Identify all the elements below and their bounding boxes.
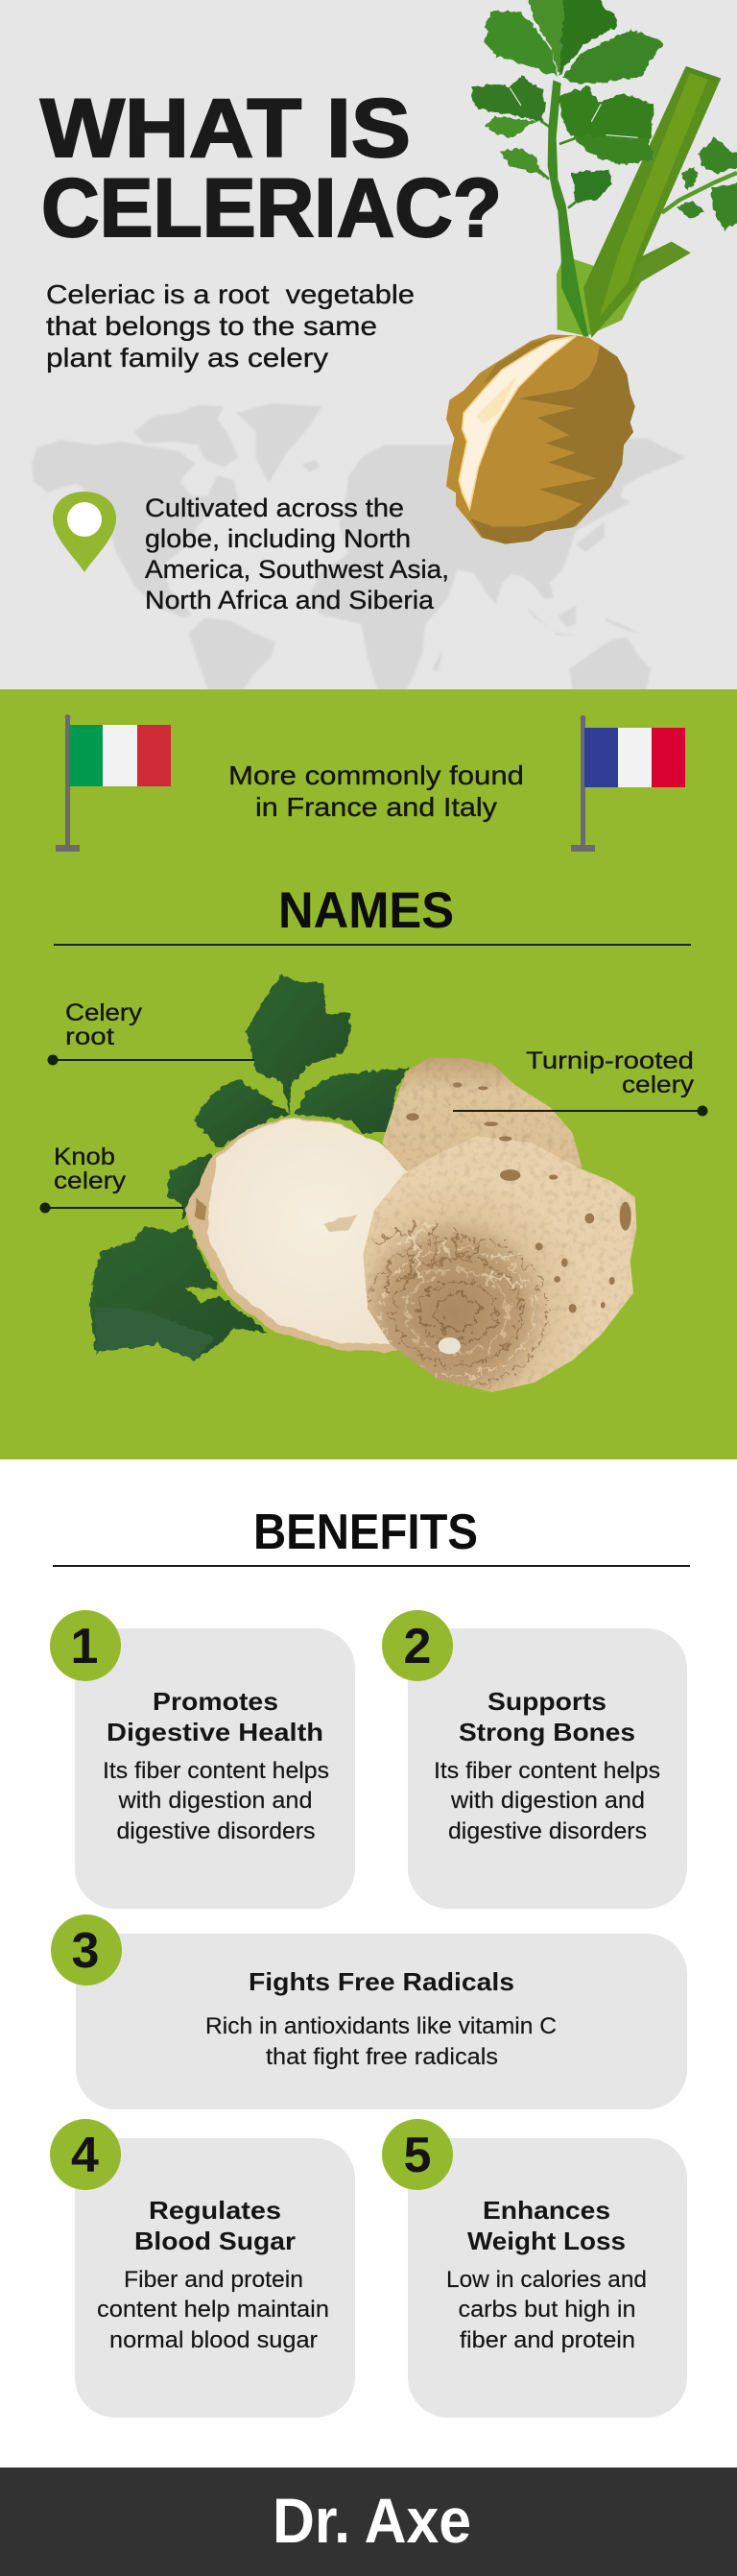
cultivation text: Cultivated across the xyxy=(145,494,404,522)
cultivation text: America, Southwest Asia, xyxy=(145,555,449,584)
title xyxy=(40,83,502,254)
card 3: free radicals: 3 xyxy=(72,1923,99,1979)
stalk xyxy=(583,66,721,338)
card 5: weight loss: Enhances xyxy=(483,2196,610,2225)
intro text xyxy=(46,279,415,373)
card 5: weight loss: fiber and protein xyxy=(460,2327,635,2353)
card 2: strong bones: with digestion and xyxy=(450,1788,645,1814)
card 2: strong bones xyxy=(382,1610,687,1909)
label: turnip-rooted celery: Turnip-rooted xyxy=(526,1047,694,1074)
label: celery root xyxy=(48,999,254,1066)
card 4: blood sugar: 4 xyxy=(71,2128,99,2183)
card 1: digestive health: Its fiber content helps xyxy=(103,1758,329,1784)
card 4: blood sugar xyxy=(50,2119,355,2418)
card 1: digestive health: Promotes xyxy=(153,1687,278,1716)
cultivation text: globe, including North xyxy=(145,524,411,553)
card 5: weight loss: Weight Loss xyxy=(467,2227,626,2255)
card 1: digestive health: Digestive Health xyxy=(107,1718,323,1746)
title: CELERIAC? xyxy=(41,162,502,254)
icon: celeriac root illustration xyxy=(446,334,635,544)
top leaf xyxy=(484,0,663,84)
stem xyxy=(548,80,588,337)
heading: names: NAMES xyxy=(278,882,454,939)
title: WHAT IS xyxy=(40,83,411,175)
card 4: blood sugar: content help maintain xyxy=(97,2297,329,2323)
small lower leaf xyxy=(572,170,611,204)
card 2: strong bones: digestive disorders xyxy=(448,1818,647,1844)
card 1: digestive health xyxy=(50,1610,355,1909)
panel: what is celeriac xyxy=(0,0,737,689)
card 2: strong bones: Its fiber content helps xyxy=(434,1758,660,1784)
card 1: digestive health: 1 xyxy=(71,1619,98,1674)
card 5: weight loss xyxy=(382,2119,687,2418)
heading: benefits: BENEFITS xyxy=(253,1505,478,1560)
card 4: blood sugar: Fiber and protein xyxy=(124,2267,303,2293)
label: celery root: Celery xyxy=(65,999,143,1026)
world map background xyxy=(32,403,686,689)
intro text: that belongs to the same xyxy=(46,311,377,341)
card 1: digestive health: digestive disorders xyxy=(117,1818,315,1844)
card 5: weight loss: Low in calories and xyxy=(446,2267,647,2293)
photo: celeriac leaves xyxy=(89,975,409,1360)
photo: cut celeriac half xyxy=(184,1117,429,1352)
footer: Dr. Axe xyxy=(0,2468,737,2576)
card 3: free radicals: that fight free radicals xyxy=(266,2044,498,2070)
icon: Italian flag xyxy=(56,714,171,852)
photo: whole celeriac roots xyxy=(355,1049,643,1399)
card 2: strong bones: 2 xyxy=(404,1619,431,1674)
card 3: free radicals: Fights Free Radicals xyxy=(249,1967,514,1996)
left leaf xyxy=(471,75,545,138)
found in text: More commonly found xyxy=(228,760,524,790)
label: celery root: root xyxy=(65,1023,114,1050)
card 3: free radicals xyxy=(51,1914,687,2109)
card 2: strong bones: Supports xyxy=(487,1687,606,1716)
panel: names xyxy=(0,689,737,1459)
card 4: blood sugar: normal blood sugar xyxy=(109,2327,318,2353)
icon: French flag xyxy=(571,715,685,852)
side branch xyxy=(662,173,737,213)
label: knob celery: celery xyxy=(54,1168,127,1194)
fibrous root texture xyxy=(368,1222,547,1387)
leaf stalks xyxy=(538,122,581,208)
label: knob celery: Knob xyxy=(54,1144,115,1170)
card 1: digestive health: with digestion and xyxy=(117,1788,313,1814)
card 4: blood sugar: Blood Sugar xyxy=(134,2227,296,2255)
collar behind stalk xyxy=(557,256,641,336)
intro text: plant family as celery xyxy=(46,343,328,373)
found in text: in France and Italy xyxy=(255,792,497,822)
card 3: free radicals: Rich in antioxidants like vitamin C xyxy=(205,2013,557,2039)
cultivation text xyxy=(145,494,449,614)
middle leaf xyxy=(559,86,654,165)
right leaflets xyxy=(677,137,737,230)
icon: location pin xyxy=(53,492,116,572)
label: turnip-rooted celery: celery xyxy=(622,1071,695,1098)
footer: Dr. Axe: Dr. Axe xyxy=(273,2485,471,2556)
card 5: weight loss: 5 xyxy=(404,2128,431,2183)
lower left leaf xyxy=(500,149,545,177)
found in text xyxy=(228,760,524,822)
card 5: weight loss: carbs but high in xyxy=(459,2297,635,2323)
card 2: strong bones: Strong Bones xyxy=(459,1718,635,1746)
panel: benefits xyxy=(0,1459,737,2468)
label: turnip-rooted celery xyxy=(453,1047,708,1116)
card 4: blood sugar: Regulates xyxy=(149,2196,281,2225)
plant: celery stem and leaves xyxy=(471,0,737,338)
leaf veins xyxy=(487,12,638,137)
cultivation text: North Africa and Siberia xyxy=(145,586,435,614)
intro text: Celeriac is a root vegetable xyxy=(46,279,415,309)
label: knob celery xyxy=(40,1144,183,1214)
